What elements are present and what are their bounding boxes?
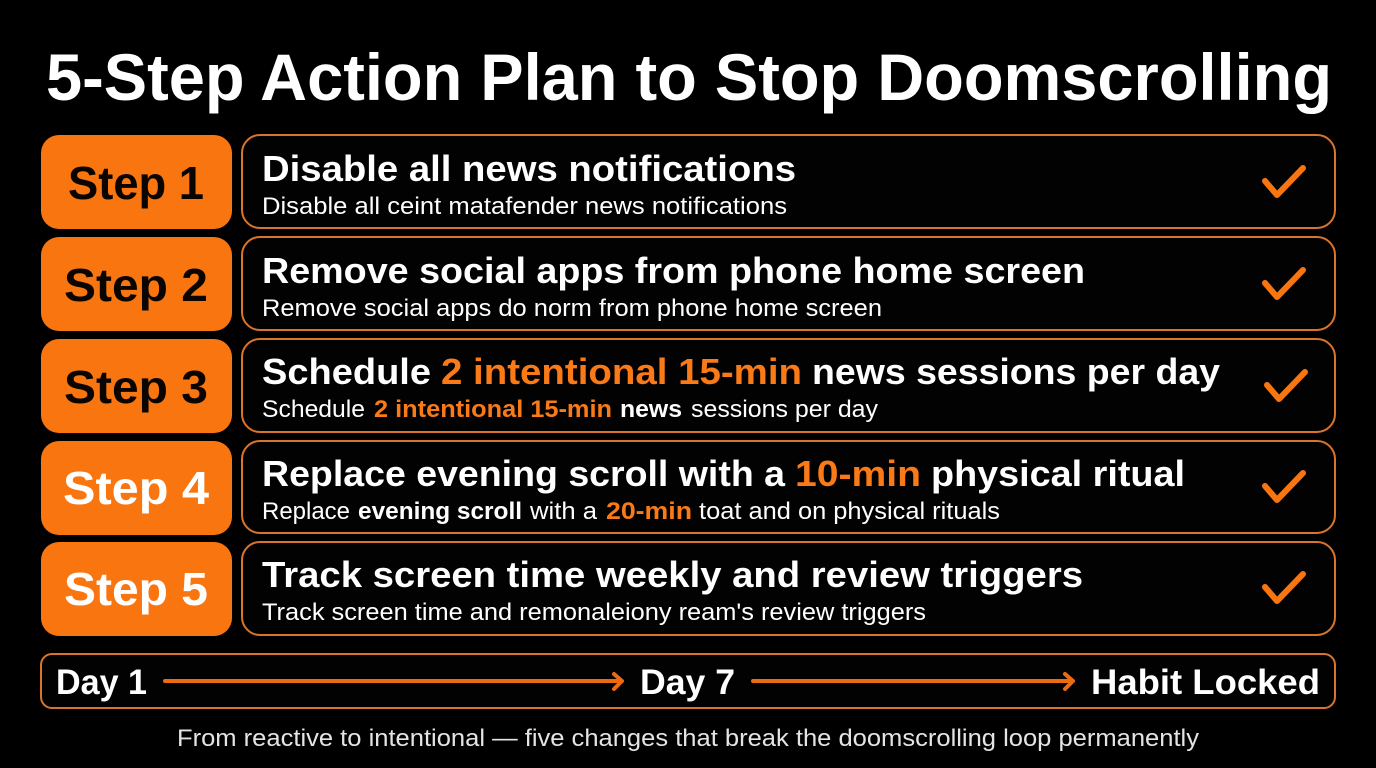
heading: step 4: physical ritual [931, 453, 1185, 494]
panel: timeline [41, 654, 1335, 708]
badge: step 1 [41, 135, 232, 229]
panel: step 2 [41, 237, 1335, 331]
panel: step 5 [41, 542, 1335, 636]
badge: step 2 [41, 237, 232, 331]
badge: step 1: Step 1 [68, 157, 204, 209]
icon: check 2 [1265, 270, 1303, 297]
icon: check 3 [1267, 372, 1305, 399]
panel: step 3 [41, 339, 1335, 433]
card: step 4 [242, 441, 1335, 533]
badge: step 2: Step 2 [64, 259, 208, 311]
heading: step 3 [262, 351, 1220, 392]
description: step 3: news [620, 396, 682, 423]
heading: step 3: news sessions per day [812, 351, 1220, 392]
badge: step 4 [41, 441, 232, 535]
description: step 3: 2 intentional 15-min [374, 396, 612, 423]
description: step 3: sessions per day [691, 396, 878, 423]
arrow: day 7 to habit locked [753, 674, 1073, 689]
description: step 4: Replace [262, 498, 350, 525]
heading: step 4 [262, 453, 1185, 494]
description: step 4: toat and on physical rituals [699, 498, 1000, 525]
description: step 3: Schedule [262, 396, 365, 423]
description: step 4: with a [529, 498, 598, 525]
badge: step 5: Step 5 [64, 563, 208, 615]
timeline frame [41, 654, 1335, 708]
description: step 5: Track screen time and remonaleiony ream's review triggers [262, 599, 926, 626]
heading: step 1: Disable all news notifications [262, 148, 796, 189]
heading: step 3: 2 intentional 15-min [441, 351, 802, 392]
label: day 7: Day 7 [640, 663, 735, 702]
footer caption: From reactive to intentional — five changes that break the doomscrolling loop permanently [177, 725, 1199, 752]
card: step 2 [242, 237, 1335, 330]
badge: step 3: Step 3 [64, 361, 208, 413]
card: step 1 [242, 135, 1335, 228]
description: step 1: Disable all ceint matafender news notifications [262, 193, 787, 220]
heading: step 3: Schedule [262, 351, 431, 392]
heading: step 2: Remove social apps from phone home screen [262, 250, 1085, 291]
badge: step 4: Step 4 [63, 462, 209, 514]
icon: check 5 [1265, 574, 1303, 601]
label: habit locked: Habit Locked [1091, 663, 1320, 702]
label: day 1: Day 1 [56, 663, 147, 702]
card: step 3 [242, 339, 1335, 432]
heading: step 4: Replace evening scroll with a [262, 453, 786, 494]
title: 5-Step Action Plan to Stop Doomscrolling [46, 40, 1332, 114]
icon: check 1 [1265, 168, 1303, 195]
description: step 4: 20-min [606, 498, 692, 525]
panel: step 4 [41, 441, 1335, 535]
card: step 5 [242, 542, 1335, 635]
description: step 2: Remove social apps do norm from phone home screen [262, 295, 882, 322]
badge: step 3 [41, 339, 232, 433]
badge: step 5 [41, 542, 232, 636]
heading: step 4: 10-min [795, 453, 921, 494]
panel: step 1 [41, 135, 1335, 229]
description: step 3 [262, 396, 878, 423]
heading: step 5: Track screen time weekly and review triggers [262, 554, 1083, 595]
description: step 4: evening scroll [358, 498, 522, 525]
icon: check 4 [1265, 473, 1303, 500]
arrow: day 1 to day 7 [165, 674, 622, 689]
description: step 4 [262, 498, 1000, 525]
